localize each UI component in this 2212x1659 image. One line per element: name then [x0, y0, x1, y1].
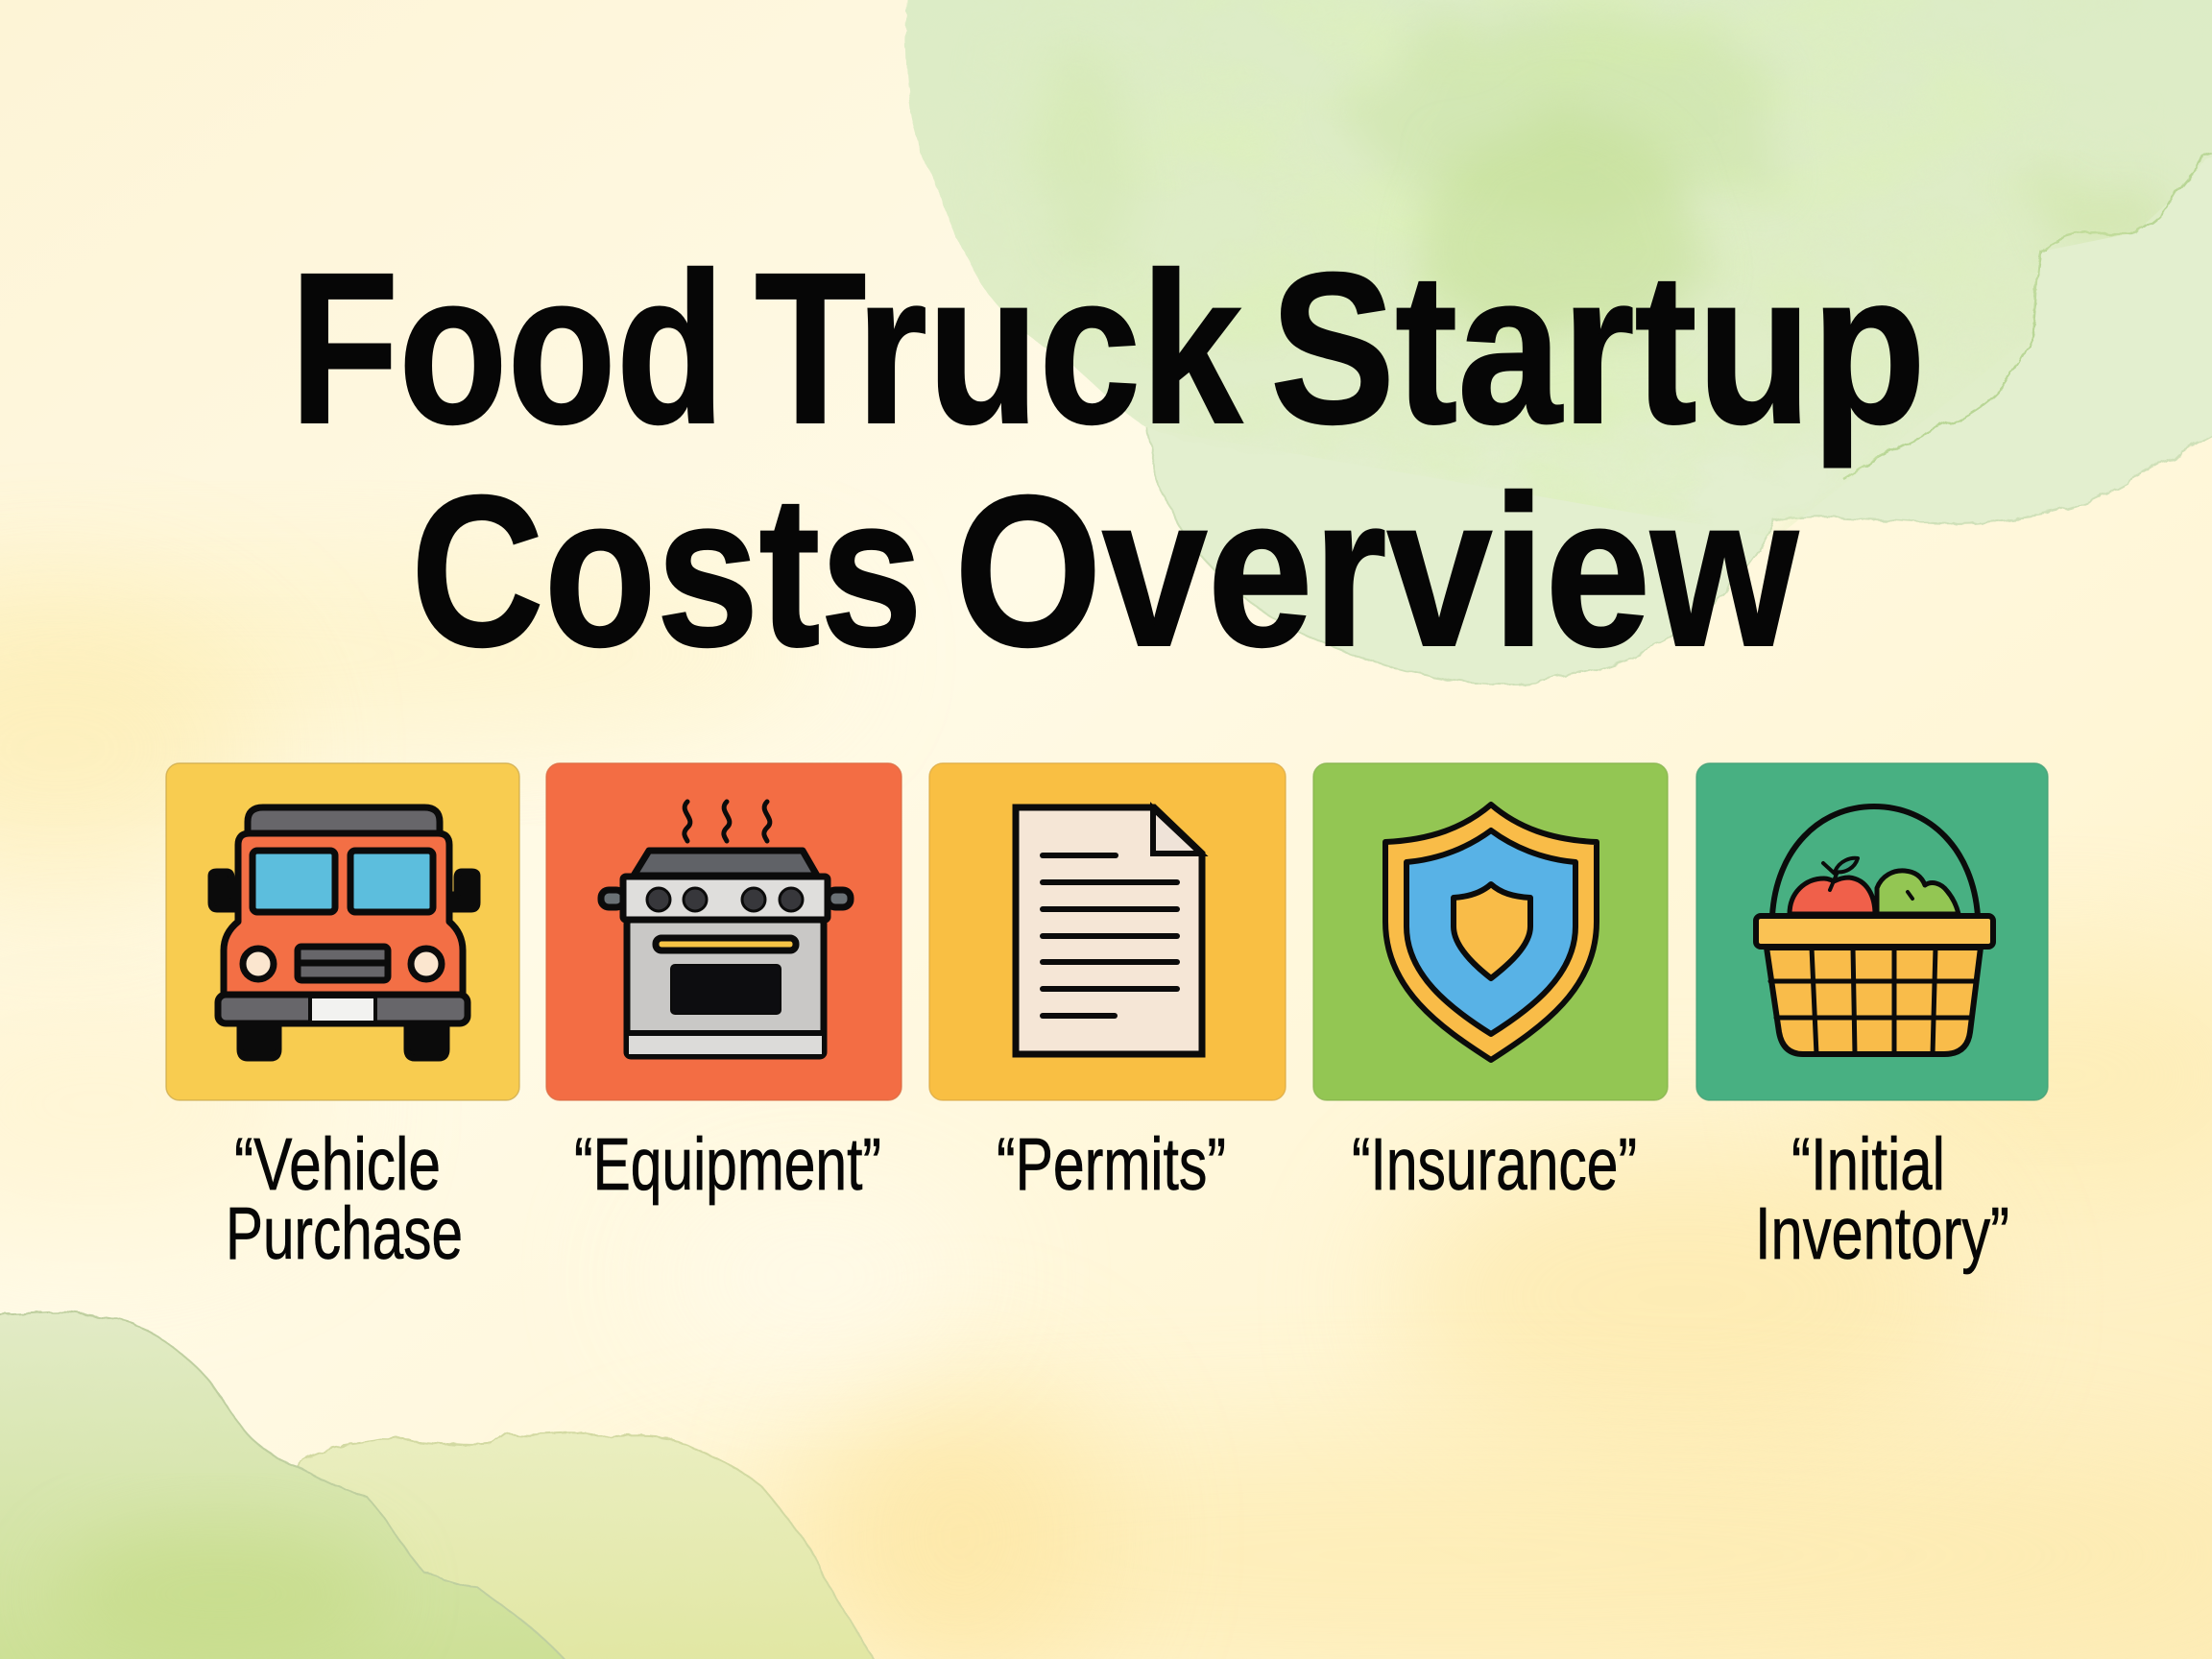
title: Overview	[954, 451, 1799, 691]
label: vehicle purchase	[226, 1123, 463, 1275]
label: insurance: “Insurance”	[1352, 1123, 1637, 1206]
title: Truck	[755, 228, 1242, 469]
label: initial inventory: Inventory”	[1755, 1192, 2009, 1275]
title: Food	[290, 228, 725, 469]
watercolor blob: top right green	[864, 0, 2212, 730]
label: permits: “Permits”	[997, 1123, 1226, 1206]
label: vehicle purchase: Purchase	[226, 1192, 463, 1275]
card: equipment	[546, 763, 902, 1100]
card: insurance	[1313, 763, 1668, 1100]
icon: stove	[601, 802, 851, 1056]
label: vehicle purchase: “Vehicle	[234, 1123, 441, 1206]
label: initial inventory: “Initial	[1791, 1123, 1945, 1206]
icon: document	[1016, 807, 1202, 1054]
icon: shield	[1385, 805, 1597, 1060]
watercolor blobs: bottom left green	[0, 1312, 902, 1659]
label: equipment: “Equipment”	[574, 1123, 881, 1206]
icon: basket with apples	[1756, 806, 1993, 1054]
icon: food truck	[211, 807, 477, 1058]
title: Startup	[1270, 228, 1926, 469]
card: initial inventory	[1696, 763, 2048, 1100]
title	[290, 228, 1926, 691]
label: initial inventory	[1755, 1123, 2009, 1275]
card: permits	[929, 763, 1286, 1100]
title: Costs	[411, 451, 923, 691]
card: vehicle purchase	[166, 763, 519, 1100]
